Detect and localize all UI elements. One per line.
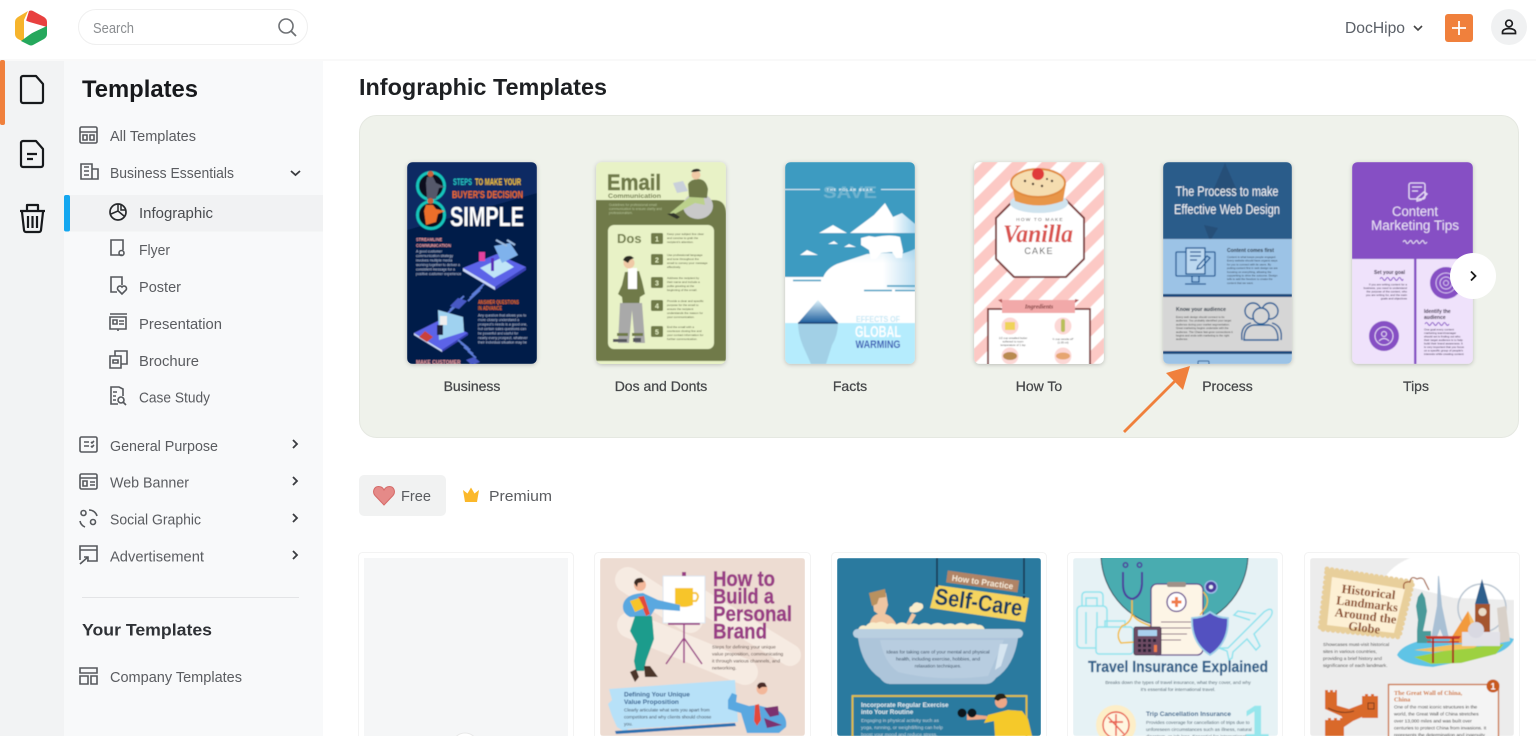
panel: category carousel [360, 116, 1518, 438]
label: How To: How To [1016, 378, 1062, 394]
thumbnail: Business: IN ADVANCE [478, 306, 503, 312]
menu: Case Study [111, 387, 211, 406]
thumbnail: Process: Content comes first [1227, 248, 1274, 254]
thumbnail: Process: Every website should have organic ways [1227, 259, 1278, 263]
thumbnail: Dos and Donts: 1 [655, 236, 659, 244]
thumbnail: How To: (1.05 ml) [1057, 340, 1069, 344]
thumbnail: Process: audience. You probably identified your target [1176, 319, 1231, 323]
card: Historical Landmarks: The Great Wall of China, [1394, 690, 1463, 697]
button: add [1445, 14, 1473, 42]
thumbnail: Business: Any question that allows you to [478, 314, 526, 318]
menu: Web Banner: Web Banner [110, 476, 189, 492]
thumbnail: Process: focusing on everything, allowing the [1227, 270, 1272, 274]
menu: Flyer [111, 240, 170, 259]
thumbnail: Facts: WARMING [856, 339, 900, 351]
thumbnail: Tips: is very important that you focus [1424, 345, 1465, 349]
label: Business: Business [444, 378, 500, 394]
thumbnail: Process: Effective Web Design [1174, 202, 1280, 217]
thumbnail: Dos and Donts: and concise to grab the [667, 236, 699, 240]
menu: Web Banner [80, 474, 297, 492]
heading: Infographic Templates: Infographic Templates [359, 74, 607, 100]
card: Historical Landmarks: over 13,000 miles and was built over [1394, 718, 1472, 724]
thumbnail: Dos and Donts: Guidelines for professional email [609, 203, 657, 207]
thumbnail: Dos and Donts: communication to ensure clarity and [609, 207, 662, 211]
thumbnail: Process: Know your audience [1176, 307, 1226, 313]
thumbnail: Dos and Donts [596, 162, 726, 366]
menu: General Purpose [80, 437, 297, 455]
card: Travel Insurance: Travel Insurance Explained [1088, 659, 1268, 676]
thumbnail: Business: A good customer [416, 250, 443, 254]
thumbnail: Tips: goals and objectives [1381, 296, 1408, 300]
tab: Free: Free [401, 488, 431, 505]
search box: Search [93, 20, 134, 37]
thumbnail: Tips: should set is finding out who [1424, 334, 1461, 338]
thumbnail: Process: content that we want. [1227, 281, 1254, 285]
menu: Social Graphic [80, 510, 297, 528]
menu: Brochure: Brochure [139, 354, 199, 370]
thumbnail: Dos and Donts: understands the reason for [667, 311, 703, 315]
menu: Presentation [110, 314, 222, 333]
card: Personal Brand: competitors and why clients should choose [624, 714, 712, 720]
card: Personal Brand: How to [713, 568, 775, 591]
menu: Advertisement: Advertisement [110, 550, 204, 566]
thumbnail: Tips [1352, 162, 1473, 364]
thumbnail: Dos and Donts: email to convey your message [667, 261, 708, 265]
card: Travel Insurance: Breaks down the types of travel insurance, what they cover, and why [1105, 680, 1251, 686]
card: Personal Brand: Value Proposition [624, 699, 679, 706]
menu: Infographic active [64, 195, 323, 232]
label: Dos and Donts: Dos and Donts [615, 378, 707, 394]
thumbnail: Business: STEPS [453, 177, 472, 187]
thumbnail: Business: BUYER'S DECISION [452, 189, 523, 201]
thumbnail: Business: SIMPLE [450, 201, 524, 232]
thumbnail: Business: their individual situation may be [478, 340, 527, 344]
thumbnail: Dos and Donts: Use professional language [667, 253, 703, 257]
thumbnail: How To: ¾ cup canola oil* [1052, 337, 1075, 341]
card: Historical Landmarks: Landmarks [1335, 593, 1399, 615]
card: Personal Brand: value proposition, communicating [712, 652, 784, 658]
thumbnail: Process [1163, 162, 1292, 367]
card: Personal Brand: Build a [713, 586, 774, 608]
thumbnail: Facts: THE POLAR BEAR [827, 187, 873, 192]
thumbnail: Dos and Donts: your communication. [667, 315, 695, 319]
menu: Presentation: Presentation [139, 317, 222, 333]
thumbnail: Business: consistent message for a [416, 268, 455, 272]
card: Travel Insurance [1067, 552, 1283, 736]
heading: Templates: Templates [82, 76, 198, 103]
menu: General Purpose: General Purpose [110, 439, 218, 455]
thumbnail: Facts: SAVE [823, 183, 877, 202]
card: Historical Landmarks [1304, 552, 1520, 736]
card: Personal Brand: you. [624, 722, 633, 726]
thumbnail: Dos and Donts: their name and include a [667, 280, 700, 284]
thumbnail: Tips: business, you need to understand [1364, 286, 1407, 290]
heading: Your Templates: Your Templates [82, 620, 212, 640]
tab: Premium [463, 488, 552, 505]
thumbnail: Facts [785, 162, 915, 364]
thumbnail: Tips: marketing team/manager [1424, 331, 1456, 335]
thumbnail: Tips: their target audience is to help [1424, 338, 1463, 342]
card: Personal Brand [594, 552, 810, 736]
menu: Infographic active: Infographic [139, 206, 213, 222]
card: Historical Landmarks: Showcases must-visit historical [1323, 642, 1389, 648]
thumbnail: How To: softened to room [1002, 340, 1024, 344]
thumbnail: Dos and Donts: 4 [655, 304, 659, 310]
thumbnail: Tips: you are writing for, and the main [1366, 293, 1407, 297]
card: Self-Care: relaxation techniques. [915, 664, 961, 670]
thumbnail: Tips: Content [1392, 204, 1438, 219]
thumbnail: Dos and Donts: recipient's attention. [667, 240, 694, 244]
label: Process: Process [1202, 378, 1253, 394]
thumbnail: How To: Vanilla [1003, 221, 1073, 248]
menu: Social Graphic: Social Graphic [110, 512, 201, 528]
thumbnail: How To: Ingredients [1024, 304, 1054, 310]
thumbnail: Process: Every web design should connect to its [1176, 315, 1225, 319]
thumbnail: Dos and Donts: Communication [608, 193, 661, 200]
label: Facts: Facts [833, 378, 867, 394]
thumbnail: Business: ANSWER QUESTIONS [478, 300, 520, 306]
thumbnail: Tips: Set your goal [1374, 270, 1406, 276]
label: Tips: Tips [1403, 378, 1429, 394]
card: Personal Brand: Clearly articulate what sets you apart from [624, 708, 710, 712]
menu: All Templates: All Templates [110, 129, 196, 145]
menu: Poster: Poster [139, 280, 181, 296]
search box [78, 10, 308, 44]
icon: trash [20, 205, 45, 232]
card: Historical Landmarks: providing a brief history and [1323, 656, 1382, 662]
thumbnail: Process: audience. The Chaos fast-grow connections it [1176, 330, 1233, 334]
card: Self-Care: into Your Routine [861, 709, 914, 716]
thumbnail: Dos and Donts: and tone throughout the [667, 257, 699, 261]
card: Travel Insurance: it's essential for international travel. [1141, 687, 1215, 693]
card: Historical Landmarks: China [1394, 696, 1411, 704]
thumbnail: Business: working together to deliver a [416, 263, 460, 267]
thumbnail: Process: tells to add the freedom to create the [1227, 277, 1273, 281]
top bar [0, 0, 1536, 60]
thumbnail: Dos and Donts: Keep your subject line clear [667, 232, 704, 236]
thumbnail: How To: 1/2 cup unsalted butter [999, 336, 1027, 340]
thumbnail: Tips: Marketing Tips [1371, 218, 1459, 233]
thumbnail: Process: The Process to make [1176, 184, 1278, 199]
thumbnail: Dos and Donts: End the email with a [667, 325, 694, 329]
thumbnail: Process: audience during your market segmentation. [1176, 322, 1230, 326]
card: Personal Brand: networking. [712, 666, 737, 672]
menu: All Templates [80, 127, 196, 145]
icon: user avatar [1491, 9, 1527, 45]
icon: DocHipo logo [15, 10, 47, 46]
active indicator [0, 60, 5, 125]
thumbnail: Business: communication strategy [416, 254, 453, 258]
card: Historical Landmarks: Historical [1341, 582, 1397, 602]
thumbnail: Tips: the purpose of the content, who [1366, 290, 1407, 294]
thumbnail: Business: more closely understand a [478, 318, 519, 322]
menu: Company Templates: Company Templates [110, 670, 242, 686]
card: Historical Landmarks: centuries to protect China from invasions. It [1394, 726, 1487, 732]
card: Travel Insurance: unforeseen circumstances such as illness, natural [1146, 727, 1252, 733]
thumbnail: How To: temperature of 1 tsp [1000, 343, 1026, 347]
menu: Brochure [110, 351, 199, 370]
card: loading placeholder [358, 552, 574, 736]
card: Historical Landmarks: significance of each landmark. [1323, 663, 1388, 669]
thumbnail: Business: but certain sales questions can [478, 327, 526, 331]
sidebar [64, 61, 323, 736]
card: Travel Insurance: Trip Cancellation Insurance [1146, 711, 1231, 718]
menu: Poster [111, 277, 181, 296]
card: Historical Landmarks: One of the most iconic structures in the [1394, 704, 1478, 710]
card: Historical Landmarks: sites in various countries, [1323, 649, 1377, 655]
thumbnail: Dos and Donts: Provide a clear and specific [667, 299, 704, 303]
menu: Business Essentials [81, 164, 300, 182]
card: Self-Care: health, including exercise, hobbies, and [896, 656, 980, 662]
thumbnail: Tips: build their brand awareness. It [1424, 342, 1463, 346]
card: Personal Brand: Defining Your Unique [624, 692, 690, 698]
account menu: DocHipo [1345, 20, 1405, 37]
card: Personal Brand: Personal [713, 603, 792, 626]
thumbnail: Business: nearly every prospect, whatever [478, 336, 528, 340]
card: Self-Care: yoga, running, or weightlifting can help [861, 725, 943, 731]
thumbnail: Dos and Donts: Address the recipient by [667, 276, 700, 280]
thumbnail: Dos and Donts: courteous closing line and [667, 329, 702, 333]
thumbnail: Business: COMMUNICATION [416, 243, 451, 249]
thumbnail: Dos and Donts: Email [607, 170, 661, 195]
menu: Business Essentials: Business Essentials [110, 166, 234, 182]
thumbnail: Tips: One goal every content [1424, 328, 1454, 332]
card: Self-Care: Incorporate Regular Exercise [861, 702, 949, 709]
thumbnail: Business: TO MAKE YOUR [475, 177, 521, 187]
card: Travel Insurance: Provides coverage for cancellation of trips due to [1146, 720, 1250, 726]
thumbnail: Dos and Donts: 5 [655, 330, 659, 336]
card: Self-Care: Engaging in physical activity such as [861, 718, 939, 724]
thumbnail: Business: prospect's needs is a good one, [478, 322, 527, 326]
thumbnail: Process: copywriting to drive the outcome. Design [1227, 274, 1278, 278]
thumbnail: Dos and Donts: 3 [655, 280, 659, 288]
card: Personal Brand: it through various channels, and [712, 658, 780, 664]
icon: text document [21, 141, 43, 167]
thumbnail: How To: CAKE [1024, 246, 1054, 256]
card: Self-Care: Ideas for taking care of your mental and physical [886, 650, 990, 656]
menu: Advertisement [80, 546, 297, 566]
thumbnail: Dos and Donts: purpose for the email to [667, 303, 699, 307]
card: Personal Brand: Steps for defining your unique [712, 644, 776, 650]
thumbnail: How To [974, 162, 1104, 369]
thumbnail: Dos and Donts: beginning of the email. [667, 288, 697, 292]
tab: Free [359, 475, 446, 516]
thumbnail: Business [407, 162, 537, 366]
thumbnail: Business: be powerful and useful for [478, 332, 519, 336]
thumbnail: Process: begins and ends with marketing to the right [1176, 334, 1230, 338]
thumbnail: Dos and Donts: further communication. [667, 337, 698, 341]
card: Self-Care: Self-Care [933, 583, 1024, 621]
thumbnail: Business: positive customer experience [416, 272, 461, 276]
thumbnail: Business: STREAMLINE [416, 237, 443, 243]
card: Historical Landmarks: Globe [1347, 619, 1381, 637]
menu: Flyer: Flyer [139, 243, 170, 259]
card: Historical Landmarks: world, the Great Wall of China stretches [1394, 712, 1479, 718]
thumbnail: Dos and Donts: effectively. [667, 265, 681, 269]
thumbnail: Tips: If you are writing content for a [1369, 282, 1407, 286]
menu: Case Study: Case Study [139, 390, 211, 406]
thumbnail: Facts: EFFECTS OF [856, 314, 900, 324]
card: Self-Care [832, 552, 1046, 736]
thumbnail: Business: involves multiple media [416, 258, 452, 262]
left icon rail [0, 60, 64, 736]
thumbnail: Process: for you to connect with its users. By [1227, 262, 1272, 266]
thumbnail: Facts: GLOBAL [855, 324, 901, 341]
card: Historical Landmarks: 1 [1490, 682, 1496, 692]
thumbnail: Tips: audience [1424, 315, 1446, 321]
card: Personal Brand: Brand [713, 620, 767, 644]
thumbnail: Dos and Donts: Dos [617, 231, 642, 246]
thumbnail: Process: Content is what keeps people engaged. [1227, 255, 1276, 259]
thumbnail: Business: MAKE CUSTOMER [416, 360, 461, 366]
thumbnail: Dos and Donts: your contact information for [667, 333, 703, 337]
thumbnail: Dos and Donts: polite greeting at the [667, 284, 695, 288]
card: Self-Care: How to Practice [951, 573, 1014, 591]
thumbnail: How To: HOW TO MAKE [1016, 217, 1064, 223]
thumbnail: Tips: on a specific group of people's [1424, 348, 1464, 352]
thumbnail: Tips: interests while creating content [1424, 352, 1464, 356]
arrow: points to Process [1124, 366, 1190, 432]
thumbnail: Dos and Donts: 2 [655, 258, 659, 264]
thumbnail: Dos and Donts: ensure the recipient [667, 307, 694, 311]
tab: Premium: Premium [489, 488, 552, 505]
button: next [1450, 253, 1496, 299]
thumbnail: Process: putting content first in web design we are [1227, 266, 1278, 270]
icon: document [21, 76, 43, 103]
thumbnail: Tips: Identify the [1424, 309, 1451, 315]
thumbnail: Dos and Donts: professionalism. [609, 211, 633, 215]
card: Historical Landmarks: Around the [1334, 605, 1398, 627]
thumbnail: Process: Great marketing begins underside with the [1176, 326, 1229, 330]
filter tabs [359, 475, 552, 516]
thumbnail: Process: audience. [1176, 337, 1188, 341]
